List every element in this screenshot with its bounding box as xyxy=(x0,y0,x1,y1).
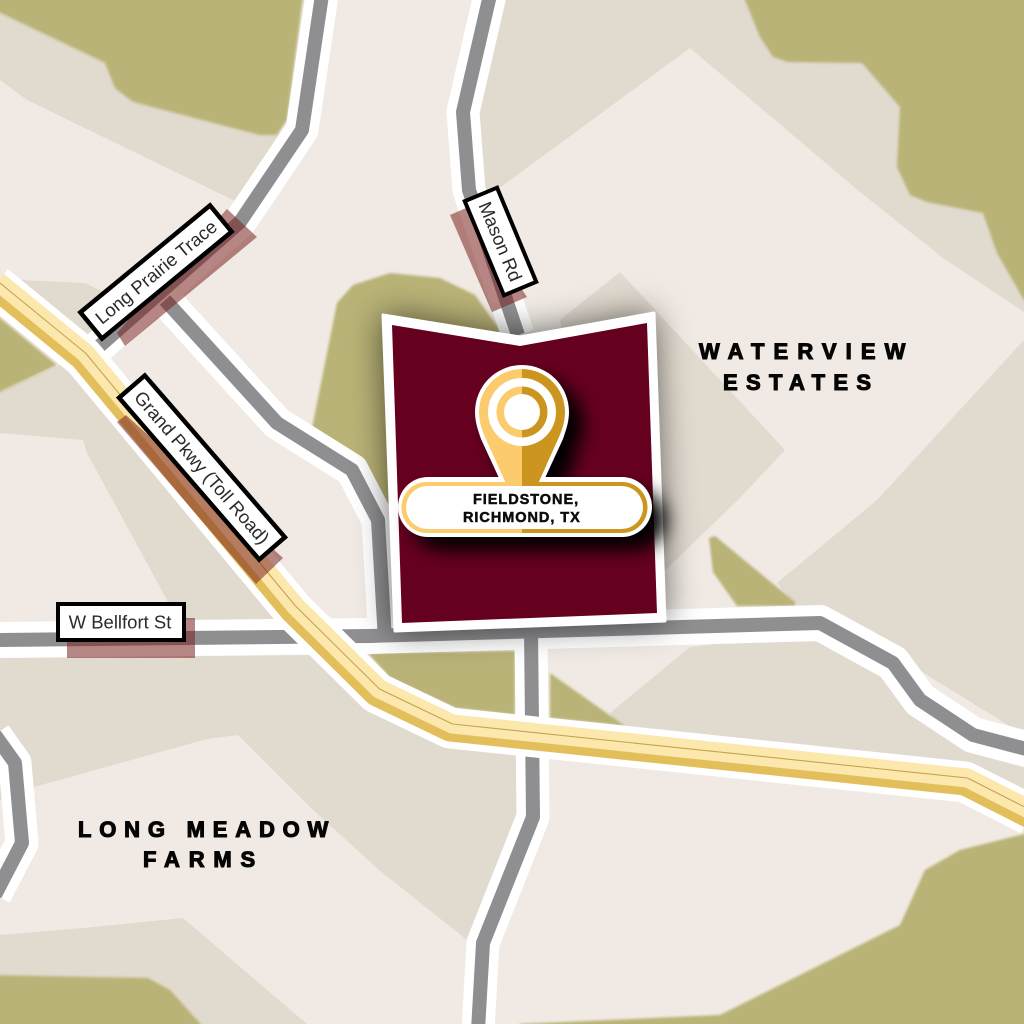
icon: location pin xyxy=(475,365,569,486)
shadow: pin and bar xyxy=(412,378,666,550)
area label: Long Meadow Farms: FARMS xyxy=(143,847,264,872)
area label: Long Meadow Farms: LONG MEADOW xyxy=(78,817,336,842)
area label: Long Meadow Farms xyxy=(78,817,336,872)
label: Long Prairie Trace: Long Prairie Trace xyxy=(91,216,221,328)
label: Mason Rd xyxy=(465,188,536,295)
panel: Fieldstone site xyxy=(382,312,666,632)
label: Mason Rd: Mason Rd xyxy=(475,199,526,284)
highway: Grand Pkwy xyxy=(0,281,1024,815)
label bar: Fieldstone, Richmond, TX: RICHMOND, TX xyxy=(463,510,581,526)
label bar: Fieldstone, Richmond, TX xyxy=(398,477,652,537)
area label: Waterview Estates xyxy=(699,339,915,395)
label strips: road highlights xyxy=(67,208,527,658)
area label: Waterview Estates: WATERVIEW xyxy=(699,339,915,364)
label: W Bellfort St xyxy=(58,604,184,640)
label bar: Fieldstone, Richmond, TX: FIELDSTONE, xyxy=(473,492,579,508)
area label: Waterview Estates: ESTATES xyxy=(723,370,879,395)
label: W Bellfort St: W Bellfort St xyxy=(69,612,171,632)
label: Grand Pkwy (Toll Road): Grand Pkwy (Toll Road) xyxy=(130,387,274,548)
